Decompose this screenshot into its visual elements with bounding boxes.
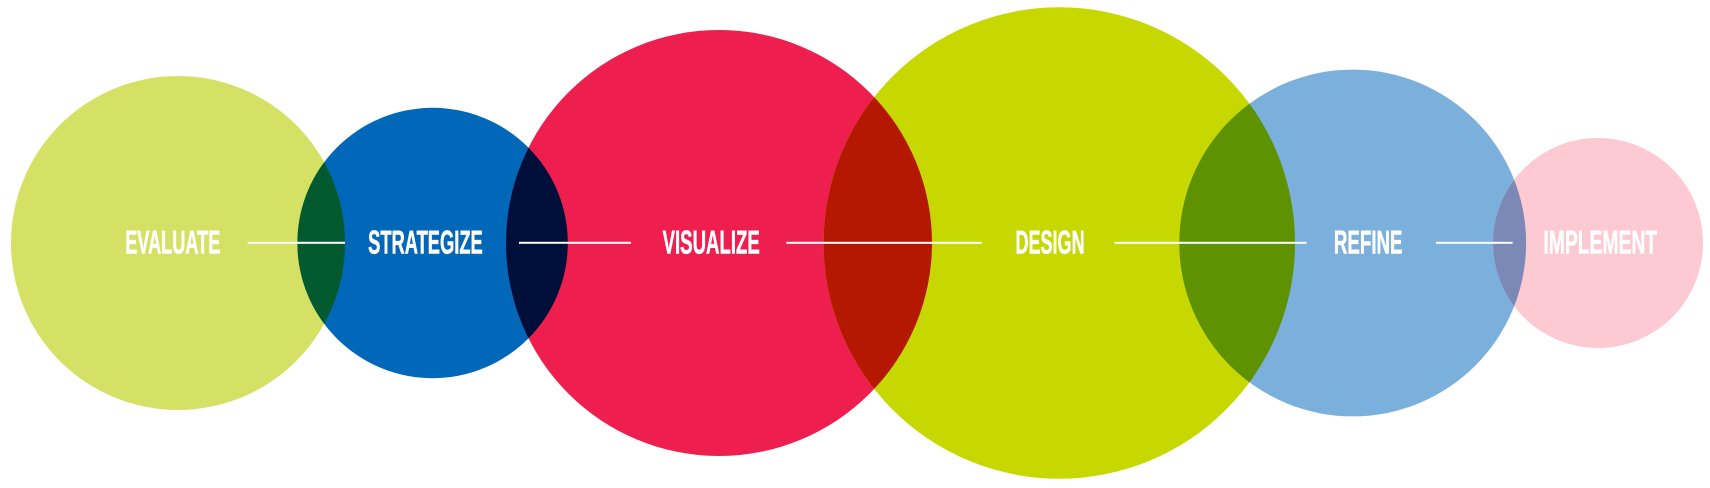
circle: strategize: [297, 108, 568, 378]
label: refine: REFINE: [1334, 223, 1403, 260]
circle: design: [824, 7, 1295, 479]
label: evaluate: EVALUATE: [125, 223, 220, 260]
connector: evaluate to strategize: [248, 242, 345, 244]
overlap: strategize and visualize: [506, 148, 568, 338]
circle: visualize: [506, 30, 932, 456]
overlap: evaluate and strategize: [297, 162, 345, 324]
overlap: design and refine: [1179, 104, 1295, 382]
circle: evaluate: [11, 76, 345, 410]
label: visualize: VISUALIZE: [663, 223, 760, 260]
circle: refine: [1179, 70, 1526, 416]
overlap: refine and implement: [1493, 180, 1526, 306]
connector: visualize to design: [786, 242, 982, 244]
label: strategize: STRATEGIZE: [368, 223, 483, 260]
connector: design to refine: [1114, 242, 1306, 244]
label: design: DESIGN: [1016, 223, 1085, 260]
connector: strategize to visualize: [519, 242, 631, 244]
connector: refine to implement: [1436, 242, 1513, 244]
circle: implement: [1493, 138, 1703, 348]
overlap: visualize and design: [824, 97, 932, 389]
label: implement: IMPLEMENT: [1543, 223, 1657, 260]
